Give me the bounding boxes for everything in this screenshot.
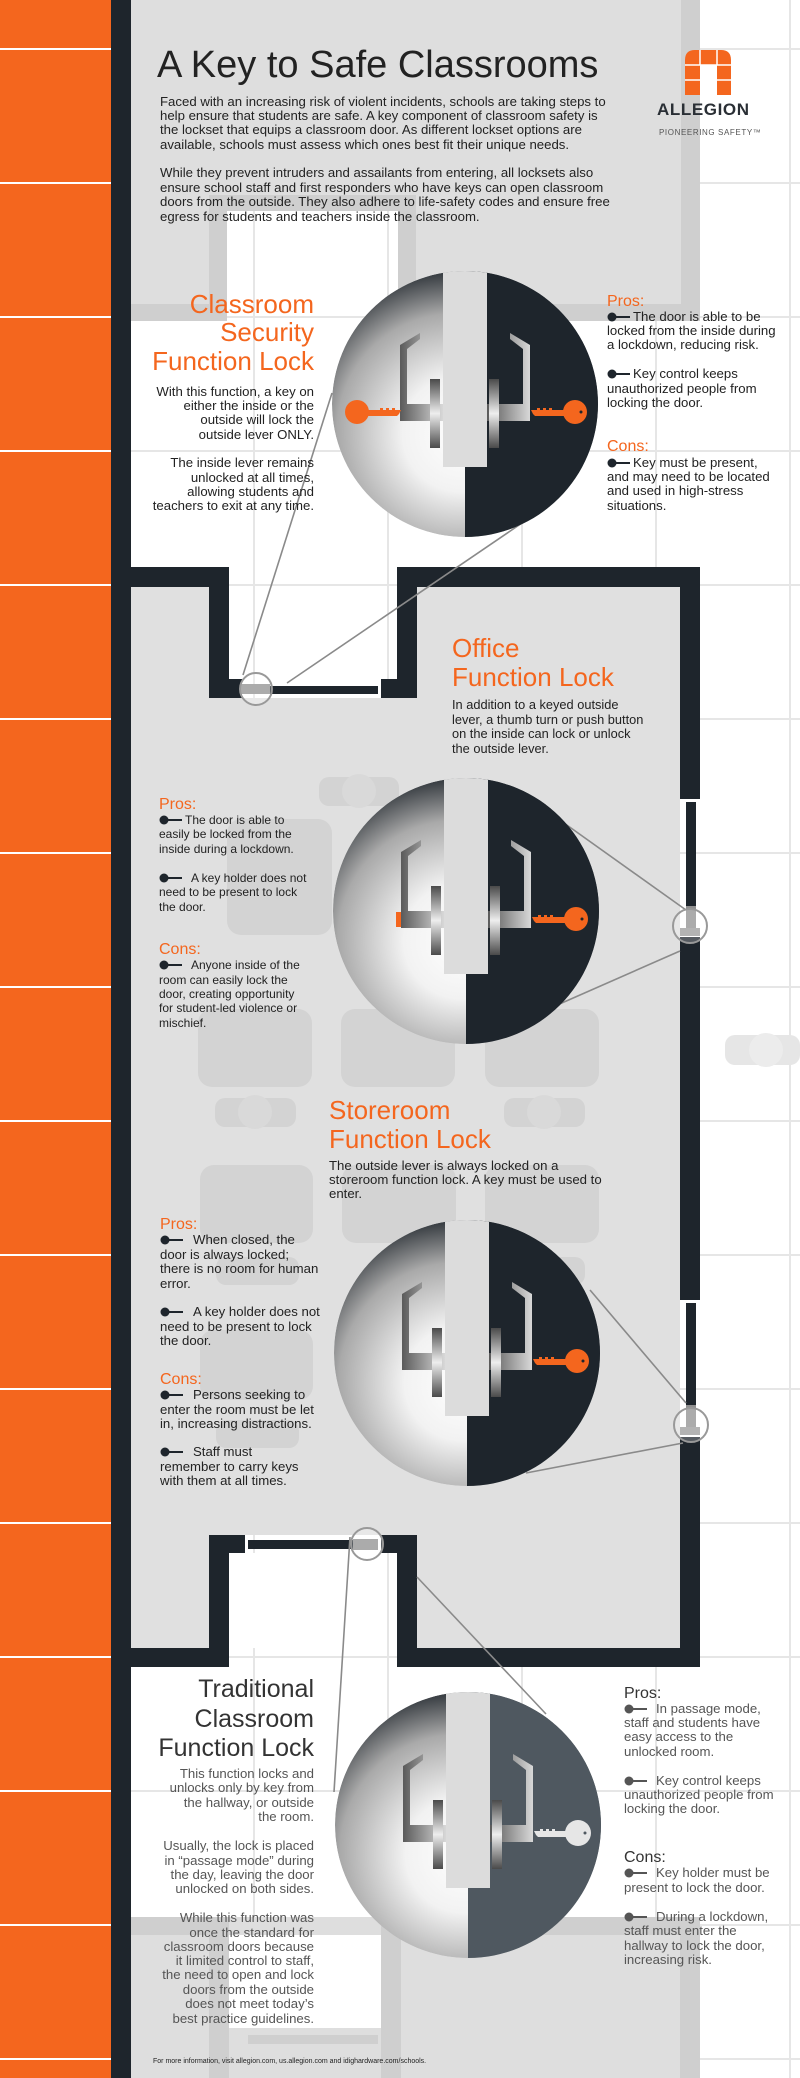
heading: traditional classroom function lock: Classroom (195, 1705, 314, 1733)
connector lines (243, 393, 686, 1792)
intro text: egress for students and teachers inside the classroom. (160, 209, 480, 224)
pros/cons: traditional: Cons: (624, 1849, 666, 1866)
heading: storeroom function lock: Storeroom (329, 1095, 450, 1125)
top room (light gray) (131, 0, 700, 321)
lock circle: office (333, 778, 599, 1044)
pros/cons: office: door, creating opportunity (159, 987, 294, 1001)
title: A Key to Safe Classrooms (157, 44, 598, 86)
text: classroom security description: With this function, a key on (156, 384, 314, 399)
text: traditional description: in “passage mode” during (164, 1853, 314, 1868)
pros/cons: classroom security: situations. (607, 498, 666, 513)
pros/cons: storeroom: Pros: (160, 1216, 197, 1233)
intro text: the lockset that equips a classroom door. As different lockset options are (160, 122, 582, 137)
intro text: doors from the outside. They also adhere to life-safety codes and ensure free (160, 194, 610, 209)
pros/cons: office: the door. (159, 900, 206, 914)
pros/cons: traditional: staff and students have (624, 1715, 760, 1730)
pros/cons: traditional: In passage mode, (656, 1701, 761, 1716)
heading: classroom security: Classroom (190, 289, 314, 319)
pros/cons: office: room can easily lock the (159, 973, 288, 987)
pros/cons: classroom security: unauthorized people from (607, 381, 757, 396)
pros/cons: classroom security: Cons: (607, 438, 649, 455)
pros/cons: classroom security: Pros: (607, 293, 644, 310)
heading: classroom security: Function Lock (152, 346, 315, 376)
pros/cons: traditional: locking the door. (624, 1801, 720, 1816)
text: classroom security description: outside lever ONLY. (199, 427, 314, 442)
text: traditional description: the room. (258, 1809, 314, 1824)
text: traditional description: This function locks and (180, 1766, 314, 1781)
text: traditional description: the day, leaving the door (171, 1867, 315, 1882)
magnifier: storeroom door (674, 1405, 708, 1442)
pros/cons: classroom security: Key control keeps (633, 366, 738, 381)
heading: classroom security (152, 289, 315, 376)
pros/cons: traditional: During a lockdown, (656, 1909, 768, 1924)
text: traditional description: it limited control to staff, (176, 1953, 314, 1968)
text: traditional description: once the standard for (189, 1925, 315, 1940)
text: classroom security description: allowing students and (187, 484, 314, 499)
pros/cons: classroom security (607, 293, 776, 513)
pros/cons: classroom security: The door is able to be (633, 309, 761, 324)
pros/cons: storeroom: remember to carry keys (160, 1459, 299, 1474)
pros/cons: classroom security: locked from the inside during (607, 323, 776, 338)
pros/cons: storeroom: A key holder does not (193, 1304, 320, 1319)
pros/cons: office: A key holder does not (191, 871, 307, 885)
heading: traditional classroom function lock: Traditional (198, 1675, 314, 1703)
pros/cons: traditional: Key control keeps (656, 1773, 761, 1788)
pros/cons: traditional: Pros: (624, 1685, 661, 1702)
text: classroom security description (153, 384, 314, 513)
text: traditional description: unlocks only by key from (170, 1780, 314, 1795)
text: classroom security description: either the inside or the (184, 398, 314, 413)
pros/cons: traditional: present to lock the door. (624, 1880, 765, 1895)
pros/cons: storeroom: need to be present to lock (160, 1319, 312, 1334)
orange side strip (0, 0, 111, 2078)
furniture (desks and chairs) (198, 774, 800, 1448)
pros/cons: storeroom: When closed, the (193, 1232, 295, 1247)
bottom room (light gray) (131, 1917, 700, 2078)
text: office description: the outside lever. (452, 741, 549, 756)
text: storeroom description: storeroom function lock. A key must be used to (329, 1172, 602, 1187)
pros/cons: office: inside during a lockdown. (159, 842, 294, 856)
heading: traditional classroom function lock (158, 1675, 314, 1762)
pros/cons: traditional: increasing risk. (624, 1952, 712, 1967)
pros/cons: traditional: easy access to the (624, 1729, 733, 1744)
text: traditional description: Usually, the lock is placed (163, 1838, 314, 1853)
pros/cons: office: mischief. (159, 1016, 206, 1030)
pros/cons: traditional: unauthorized people from (624, 1787, 774, 1802)
lock circle: classroom security (332, 271, 598, 537)
intro text: ensure school staff and first responders who have keys can open classroom (160, 180, 603, 195)
pros/cons: classroom security: a lockdown, reducing risk. (607, 337, 759, 352)
pros/cons: office: Anyone inside of the (191, 958, 300, 972)
text: classroom security description: teachers to exit at any time. (153, 498, 314, 513)
heading: storeroom function lock (329, 1095, 492, 1154)
pros/cons: classroom security: Key must be present, (633, 455, 758, 470)
text: classroom security description: outside will lock the (200, 412, 314, 427)
lock circle: traditional (335, 1692, 601, 1958)
logo: Allegion (657, 50, 761, 137)
intro text: help ensure that students are safe. A key component of classroom safety is (160, 108, 598, 123)
intro text: Faced with an increasing risk of violent incidents, schools are taking steps to (160, 94, 606, 109)
pros/cons: storeroom: Cons: (160, 1371, 202, 1388)
pros/cons: traditional: Key holder must be (656, 1865, 770, 1880)
text: storeroom description: The outside lever is always locked on a (329, 1158, 559, 1173)
pros/cons: storeroom: enter the room must be let (160, 1402, 314, 1417)
heading: storeroom function lock: Function Lock (329, 1124, 492, 1154)
logo: Allegion: ALLEGION (657, 100, 750, 119)
pros/cons: office: Pros: (159, 796, 196, 813)
text: classroom security description: unlocked at all times, (191, 470, 314, 485)
text: storeroom description (329, 1158, 602, 1201)
text: storeroom description: enter. (329, 1186, 362, 1201)
pros/cons: storeroom (159, 1216, 320, 1488)
pros/cons: office: for student-led violence or (159, 1001, 297, 1015)
pros/cons: storeroom: error. (160, 1276, 191, 1291)
pros/cons: office (159, 796, 307, 1030)
text: traditional description: the need to open and lock (162, 1967, 314, 1982)
pros/cons: storeroom: Persons seeking to (193, 1387, 305, 1402)
text: traditional description: classroom doors because (164, 1939, 314, 1954)
pros/cons: storeroom: there is no room for human (160, 1261, 318, 1276)
text: traditional description (162, 1766, 315, 2026)
text: office description: on the inside can lock or unlock (452, 726, 631, 741)
pros/cons: storeroom: in, increasing distractions. (160, 1416, 312, 1431)
intro text: While they prevent intruders and assailants from entering, all locksets also (160, 165, 593, 180)
heading: office function lock: Office (452, 633, 519, 663)
walls (111, 0, 700, 2078)
pros/cons: storeroom: door is always locked; (160, 1247, 289, 1262)
classroom floor (131, 587, 680, 1648)
text: office description: lever, a thumb turn or push button (452, 712, 643, 727)
pros/cons: office: Cons: (159, 941, 201, 958)
text: traditional description: best practice guidelines. (173, 2011, 314, 2026)
pros/cons: classroom security: and may need to be located (607, 469, 770, 484)
text: office description (452, 697, 643, 756)
heading: office function lock: Function Lock (452, 662, 615, 692)
pros/cons: traditional: unlocked room. (624, 1744, 714, 1759)
pros/cons: traditional: staff must enter the (624, 1923, 737, 1938)
magnifier: office door (673, 906, 707, 943)
pros/cons: storeroom: Staff must (193, 1444, 252, 1459)
intro text: available, schools must assess which ones best fit their unique needs. (160, 137, 569, 152)
pros/cons: office: easily be locked from the (159, 827, 292, 841)
logo: Allegion: PIONEERING SAFETY™ (659, 128, 761, 137)
pros/cons: classroom security: and used in high-stress (607, 483, 744, 498)
text: traditional description: unlocked on both sides. (175, 1881, 314, 1896)
lock circle: storeroom (334, 1220, 600, 1486)
pros/cons: storeroom: the door. (160, 1333, 211, 1348)
pros/cons: office: need to be present to lock (159, 885, 298, 899)
heading: office function lock (452, 633, 615, 692)
text: traditional description: the hallway, or outside (184, 1795, 314, 1810)
text: classroom security description: The inside lever remains (170, 455, 314, 470)
magnifier: traditional door (351, 1528, 383, 1560)
pros/cons: traditional (624, 1685, 774, 1967)
pros/cons: traditional: hallway to lock the door, (624, 1938, 765, 1953)
heading: classroom security: Security (220, 317, 314, 347)
heading: traditional classroom function lock: Function Lock (158, 1734, 314, 1762)
pros/cons: office: The door is able to (185, 813, 285, 827)
text: traditional description: While this function was (180, 1910, 314, 1925)
pros/cons: classroom security: locking the door. (607, 395, 703, 410)
text: traditional description: does not meet today’s (185, 1996, 314, 2011)
text: office description: In addition to a keyed outside (452, 697, 618, 712)
pros/cons: storeroom: with them at all times. (159, 1473, 287, 1488)
text: traditional description: doors from the outside (183, 1982, 314, 1997)
footer: For more information, visit allegion.com, us.allegion.com and idighardware.com/schools. (153, 2058, 426, 2065)
magnifier: classroom door (240, 673, 272, 705)
intro text (160, 94, 610, 224)
